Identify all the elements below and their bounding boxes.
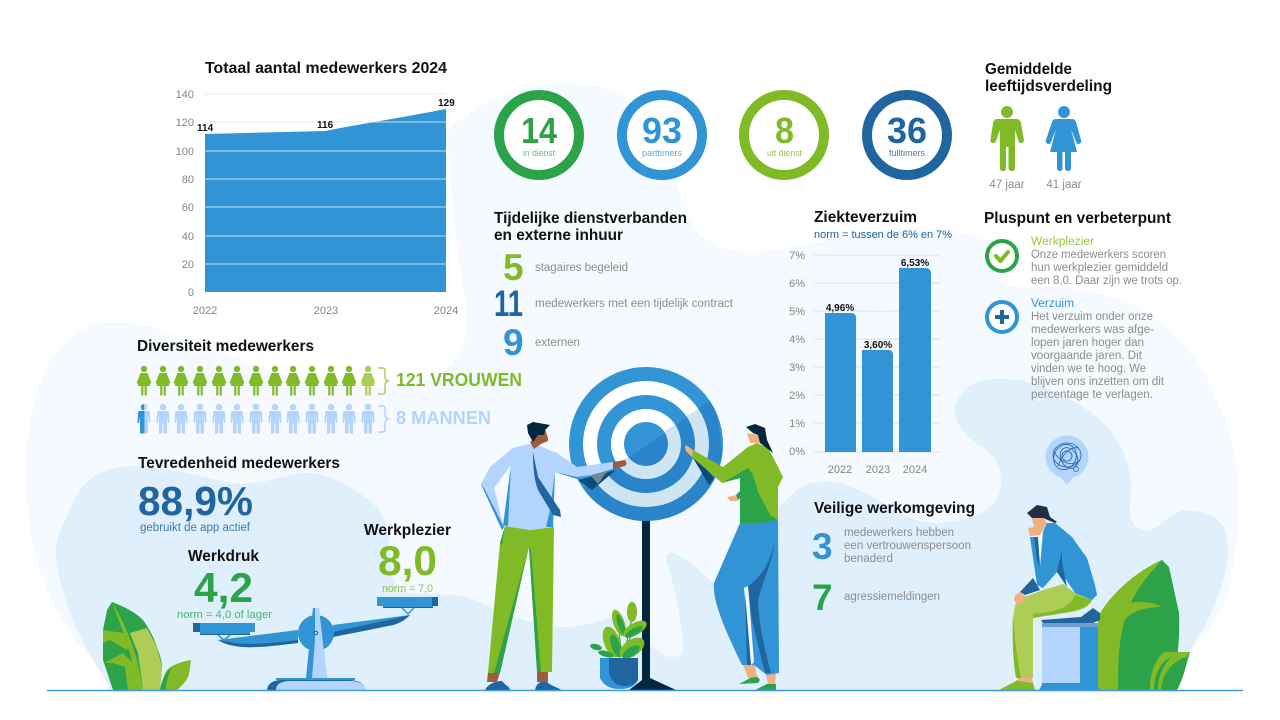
y axis labels: 60: [182, 202, 194, 214]
y axis labels: 100: [176, 146, 194, 158]
pivot and post: [298, 615, 334, 651]
contracts: [494, 283, 734, 324]
icon: man: [990, 106, 1024, 171]
bars: [825, 268, 931, 452]
heading: Pluspunt en verbeterpunt: [984, 210, 1172, 227]
y axis labels: [176, 89, 194, 299]
shaded half: [583, 401, 722, 521]
panel: werkdruk: [177, 548, 272, 621]
x axis labels: 2022: [193, 305, 217, 317]
value: 4,2: [194, 564, 253, 611]
ring: uit dienst: uit dienst: [767, 148, 802, 158]
bar values: 3,60%: [864, 340, 892, 351]
ring: parttimers: 93: [642, 110, 682, 151]
ring: uit dienst: [744, 95, 824, 175]
value labels: [197, 98, 455, 134]
text: verzuim: medewerkers was afge-: [1031, 324, 1154, 336]
contracts: medewerkers met een tijdelijk contract: [535, 298, 734, 310]
text: werkplezier: hun werkplezier gemiddeld: [1031, 262, 1168, 274]
panel: staff rings: [499, 95, 947, 175]
area: [205, 109, 446, 292]
illustration: thinking woman: [999, 505, 1100, 690]
ages: 41 jaar: [1046, 179, 1082, 191]
illustration: man: [481, 422, 626, 690]
trousers: [714, 520, 779, 675]
women pictogram row: [136, 366, 376, 396]
stool: [1042, 623, 1098, 686]
value: 8,0: [378, 537, 437, 584]
trust person stat: benaderd: [844, 553, 893, 565]
y axis labels: [789, 250, 805, 458]
base: [267, 680, 365, 690]
bar values: 4,96%: [826, 303, 854, 314]
text: verzuim: [1031, 298, 1165, 401]
heading: Tijdelijke dienstverbanden: [494, 210, 687, 227]
heading: leeftijdsverdeling: [985, 78, 1112, 95]
y axis labels: 1%: [789, 418, 805, 430]
aggression stat: 7: [812, 577, 833, 618]
ring: parttimers: parttimers: [642, 148, 682, 158]
bar values: 6,53%: [901, 258, 929, 269]
y axis labels: 20: [182, 259, 194, 271]
text: verzuim: vinden we te hoog. We: [1031, 363, 1146, 375]
icon: woman: [1046, 106, 1081, 171]
y axis labels: 120: [176, 117, 194, 129]
heading: Veilige werkomgeving: [814, 500, 975, 517]
externen: 9: [503, 322, 524, 363]
big percentage: 88,9%: [138, 478, 253, 524]
heading: Gemiddelde: [985, 61, 1072, 78]
text: werkplezier: Onze medewerkers scoren: [1031, 249, 1166, 261]
hand: [613, 460, 626, 469]
value labels: 116: [317, 120, 334, 131]
shoes: [485, 681, 561, 690]
heading: Werkplezier: [364, 522, 451, 539]
text: verzuim: percentage te verlagen.: [1031, 389, 1153, 401]
heading: Ziekteverzuim: [814, 209, 917, 226]
head: [747, 433, 761, 443]
value labels: 129: [438, 98, 455, 109]
tie: [533, 452, 561, 517]
beams: [218, 615, 410, 647]
illustration: target: [569, 367, 723, 690]
y axis labels: 140: [176, 89, 194, 101]
background: medium blob: [56, 379, 1228, 690]
panel: werkplezier: [364, 522, 451, 595]
text: verzuim: blijven ons inzetten om dit: [1031, 376, 1165, 388]
y axis labels: 40: [182, 231, 194, 243]
trust person stat: medewerkers hebben: [844, 527, 954, 539]
right pan: [377, 597, 438, 608]
text: verzuim: lopen jaren hoger dan: [1031, 337, 1144, 349]
heading: Tevredenheid medewerkers: [138, 455, 340, 472]
caption: gebruikt de app actief: [140, 522, 251, 534]
background: light blob: [26, 83, 1238, 690]
contracts: 11: [494, 283, 523, 324]
illustration: balance scale: [193, 597, 438, 690]
illustration: woman at target: [685, 424, 783, 690]
trust person stat: een vertrouwenspersoon: [844, 540, 971, 552]
y axis labels: 4%: [789, 334, 805, 346]
shoe: [999, 680, 1035, 690]
text: werkplezier: [1031, 236, 1182, 287]
y axis labels: 0%: [789, 446, 805, 458]
trust person stat: [812, 526, 971, 567]
x axis labels: 2024: [903, 464, 927, 476]
shirt: [481, 443, 613, 530]
y axis labels: 7%: [789, 250, 805, 262]
head: [530, 429, 548, 449]
y axis labels: 6%: [789, 278, 805, 290]
ground line: [47, 690, 1243, 692]
y axis labels: 0: [188, 287, 194, 299]
x axis labels: 2022: [828, 464, 852, 476]
ring: in dienst: in dienst: [523, 148, 555, 158]
externen: externen: [535, 337, 580, 349]
shoes: [739, 675, 776, 690]
panel: temporary contracts: [494, 210, 734, 363]
back arm: [1020, 578, 1040, 595]
panel: sick leave bar chart: [789, 209, 952, 476]
heading: Werkdruk: [188, 548, 259, 565]
legs: [1013, 584, 1092, 678]
women label: 121 VROUWEN: [396, 370, 522, 390]
externen: [503, 322, 580, 363]
norm: norm = tussen de 6% en 7%: [814, 229, 952, 241]
text: werkplezier: Werkplezier: [1031, 236, 1094, 248]
y axis labels: 2%: [789, 390, 805, 402]
illustration: pot plant: [589, 602, 649, 689]
heading: Diversiteit medewerkers: [137, 338, 314, 355]
norm: norm = 7,0: [382, 583, 433, 595]
y axis labels: 80: [182, 174, 194, 186]
ring: fulltimers: 36: [887, 110, 927, 151]
x axis labels: 2023: [866, 464, 890, 476]
x axis labels: [828, 464, 927, 476]
ring: in dienst: 14: [521, 110, 557, 151]
panel: plus and improvement points: [984, 210, 1182, 401]
x axis labels: 2024: [434, 305, 458, 317]
text: verzuim: Het verzuim onder onze: [1031, 311, 1153, 323]
heading: en externe inhuur: [494, 227, 623, 244]
men label: 8 MANNEN: [396, 408, 491, 428]
stagiaires: 5: [503, 247, 524, 288]
y axis labels: 5%: [789, 306, 805, 318]
torso: [1030, 523, 1097, 600]
icon: plus: [987, 302, 1017, 332]
icon: check: [987, 241, 1017, 271]
post: [629, 518, 676, 690]
aggression stat: [812, 577, 940, 618]
illustration: left plant: [103, 602, 191, 690]
ring: fulltimers: [867, 95, 947, 175]
panel: safe workplace: [812, 500, 975, 618]
hand shadows: [578, 470, 616, 490]
left pan: [193, 623, 255, 635]
ring: uit dienst: 8: [775, 110, 794, 151]
chart title: Totaal aantal medewerkers 2024: [205, 60, 447, 77]
head: [1028, 518, 1047, 536]
ring: parttimers: [622, 95, 702, 175]
text: verzuim: Verzuim: [1031, 298, 1074, 310]
value labels: 114: [197, 123, 214, 134]
top: [692, 443, 783, 523]
pot: [600, 658, 638, 689]
stagiaires: [503, 247, 628, 288]
panel: average age: [985, 61, 1112, 191]
illustration: right plant: [1098, 560, 1190, 690]
icon: tangled thoughts bubble: [1046, 436, 1088, 484]
trust person stat: 3: [812, 526, 833, 567]
ages: 47 jaar: [989, 179, 1025, 191]
rings: [569, 367, 723, 521]
bar values: [826, 258, 929, 351]
x axis labels: [193, 305, 458, 317]
panel: total employees area chart: [176, 60, 458, 317]
norm: norm = 4,0 of lager: [177, 609, 272, 621]
panel: diversity: [136, 338, 522, 434]
text: werkplezier: een 8,0. Daar zijn we trots op.: [1031, 275, 1182, 287]
x axis labels: 2023: [314, 305, 338, 317]
ages: [989, 179, 1082, 191]
men pictogram row: [138, 404, 374, 434]
panel: satisfaction: [138, 455, 340, 534]
stagiaires: stagaires begeleid: [535, 262, 628, 274]
y axis labels: 3%: [789, 362, 805, 374]
text: verzuim: voorgaande jaren. Dit: [1031, 350, 1143, 362]
aggression stat: agressiemeldingen: [844, 591, 940, 603]
trousers: [488, 526, 554, 673]
ring: fulltimers: fulltimers: [889, 148, 925, 158]
ring: in dienst: [499, 95, 579, 175]
